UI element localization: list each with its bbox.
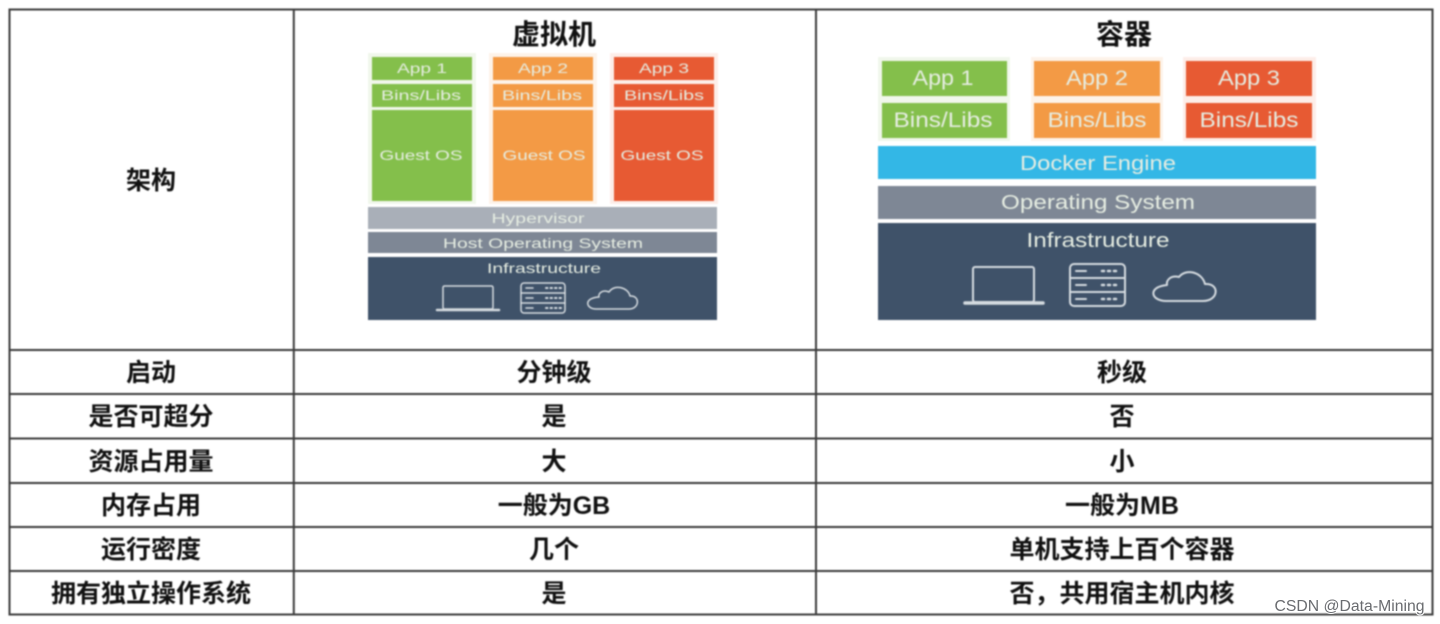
- row: 是否可超分: 是: [541, 403, 567, 431]
- App 1 stack: [882, 61, 1007, 138]
- row: 是否可超分: 否: [1109, 403, 1135, 431]
- icon: laptop: [965, 267, 1043, 303]
- App 1 stack: Bins/Libs: [381, 87, 461, 103]
- App 3 stack: [1186, 61, 1312, 138]
- icon: server: [1070, 264, 1125, 306]
- icon: server: [521, 283, 565, 313]
- row: 资源占用量: 小: [1109, 448, 1135, 476]
- row: 资源占用量: 大: [541, 448, 567, 476]
- App 3 stack: App 3: [639, 60, 689, 76]
- App 2 stack: App 2: [1066, 67, 1128, 90]
- App 2 stack: [1034, 61, 1160, 138]
- Host Operating System layer: [368, 232, 717, 253]
- row: 是否可超分: [88, 403, 1135, 431]
- Infrastructure layer: [368, 257, 717, 320]
- Hypervisor layer: Hypervisor: [492, 210, 585, 226]
- App 3 stack: Guest OS: [620, 147, 704, 163]
- Docker Engine layer: Docker Engine: [1020, 152, 1176, 175]
- Operating System layer: Operating System: [1001, 191, 1195, 214]
- row: 内存占用: [101, 492, 1179, 520]
- App 1 stack: Bins/Libs: [894, 109, 992, 132]
- App 3 stack: [614, 57, 714, 201]
- row: 启动: 分钟级: [516, 359, 592, 387]
- heading: 虚拟机: 虚拟机: [512, 19, 596, 50]
- Infrastructure layer: Infrastructure: [1026, 229, 1170, 252]
- App 1 stack: App 1: [912, 67, 974, 90]
- row: 启动: 秒级: [1097, 359, 1147, 387]
- row: 内存占用: 一般为GB: [498, 492, 610, 520]
- App 3 stack: Bins/Libs: [624, 87, 704, 103]
- row: 拥有独立操作系统: 拥有独立操作系统: [51, 580, 251, 608]
- App 3 stack: Bins/Libs: [1200, 109, 1298, 132]
- row: 运行密度: 运行密度: [101, 535, 201, 564]
- App 1 stack: App 1: [397, 60, 447, 76]
- Infrastructure layer: [878, 223, 1316, 320]
- Operating System layer: [878, 186, 1316, 219]
- row: 启动: [126, 359, 1147, 387]
- row: 内存占用: 内存占用: [101, 492, 201, 520]
- row: 资源占用量: [88, 448, 1135, 476]
- diagram: container architecture: [878, 57, 1316, 320]
- App 2 stack: Bins/Libs: [1048, 109, 1146, 132]
- heading: 容器: 容器: [1096, 19, 1152, 50]
- Docker Engine layer: [878, 146, 1316, 179]
- icon: cloud: [1153, 272, 1216, 301]
- row: 是否可超分: 是否可超分: [88, 403, 214, 431]
- heading: 架构 row label: 架构: [126, 167, 176, 195]
- icon: cloud: [588, 287, 637, 309]
- App 2 stack: Bins/Libs: [502, 87, 582, 103]
- Host Operating System layer: Host Operating System: [443, 235, 643, 251]
- Hypervisor layer: [368, 207, 717, 229]
- row: 拥有独立操作系统: [51, 580, 1235, 608]
- App 2 stack: [493, 57, 593, 201]
- row: 运行密度: [101, 535, 1235, 564]
- App 1 stack: [372, 57, 472, 201]
- App 3 stack: App 3: [1218, 67, 1280, 90]
- App 2 stack: App 2: [518, 60, 568, 76]
- App 1 stack: Guest OS: [380, 147, 462, 163]
- watermark: CSDN @Data-Mining: [1274, 598, 1424, 615]
- row: 拥有独立操作系统: 否，共用宿主机内核: [1009, 580, 1235, 608]
- row: 资源占用量: 资源占用量: [88, 448, 214, 476]
- row: 内存占用: 一般为MB: [1065, 492, 1179, 520]
- App 2 stack: Guest OS: [502, 147, 586, 163]
- row: 运行密度: 单机支持上百个容器: [1009, 535, 1235, 564]
- row: 运行密度: 几个: [529, 536, 579, 564]
- row: 拥有独立操作系统: 是: [541, 580, 567, 608]
- Infrastructure layer: Infrastructure: [487, 260, 601, 276]
- row: 启动: 启动: [126, 359, 176, 387]
- diagram: virtual machine architecture: [368, 53, 718, 320]
- icon: laptop: [437, 286, 499, 310]
